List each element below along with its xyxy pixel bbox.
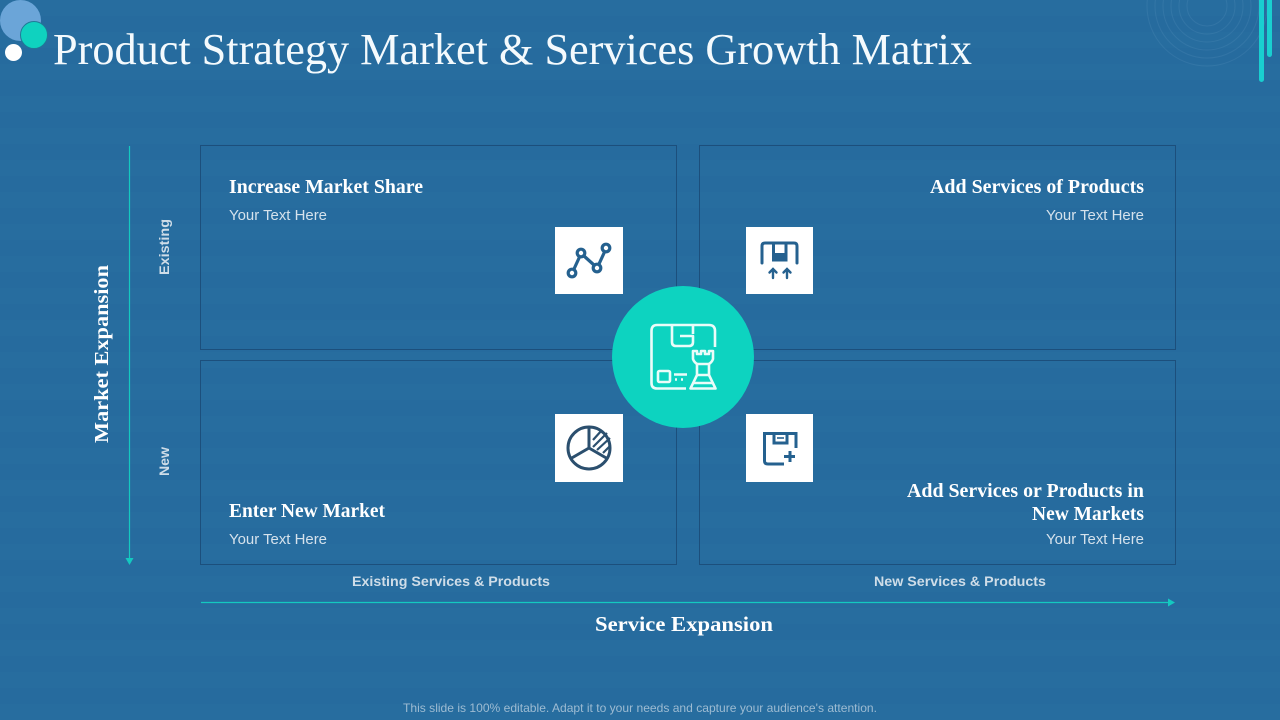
label: new: New <box>157 446 172 476</box>
panel: increase market share <box>200 146 676 350</box>
text: your text here: Your Text Here <box>1046 207 1144 224</box>
title: Product Strategy Market & Services Growth Matrix <box>53 25 972 74</box>
decorative circles top-left <box>0 0 48 61</box>
label: service expansion: Service Expansion <box>595 612 773 636</box>
icon: line graph <box>555 227 623 294</box>
panel: add services or products in new markets <box>700 360 1176 564</box>
text: your text here: Your Text Here <box>229 207 327 224</box>
arrow: market expansion <box>126 146 134 565</box>
label: existing: Existing <box>157 219 172 275</box>
heading: add services or products in new markets: New Markets <box>1032 504 1144 525</box>
panel: enter new market <box>200 360 676 564</box>
decorative concentric rings top-right <box>1147 0 1267 66</box>
heading: increase market share: Increase Market Share <box>229 177 423 198</box>
text: your text here: Your Text Here <box>229 531 327 548</box>
heading: add services or products in new markets <box>907 481 1144 525</box>
label: existing services and products: Existing Services & Products <box>352 573 550 589</box>
central circle icon: box with chess rook <box>612 286 754 428</box>
text: your text here: Your Text Here <box>1046 531 1144 548</box>
heading: add services or products in new markets: Add Services or Products in <box>907 481 1144 502</box>
arrow: service expansion <box>201 598 1175 606</box>
label: market expansion: Market Expansion <box>91 264 113 443</box>
icon: pie chart <box>555 414 623 482</box>
label: new services and products: New Services & Products <box>874 573 1046 589</box>
icon: package lift with up arrows <box>746 227 813 294</box>
decorative teal bars top-right <box>1259 0 1272 82</box>
panel: add services of products <box>700 146 1176 350</box>
footer note: This slide is 100% editable. Adapt it to your needs and capture your audience's attention. <box>403 701 877 715</box>
icon: package with plus <box>746 414 813 482</box>
heading: enter new market: Enter New Market <box>229 501 385 522</box>
heading: add services of products: Add Services of Products <box>930 177 1144 198</box>
